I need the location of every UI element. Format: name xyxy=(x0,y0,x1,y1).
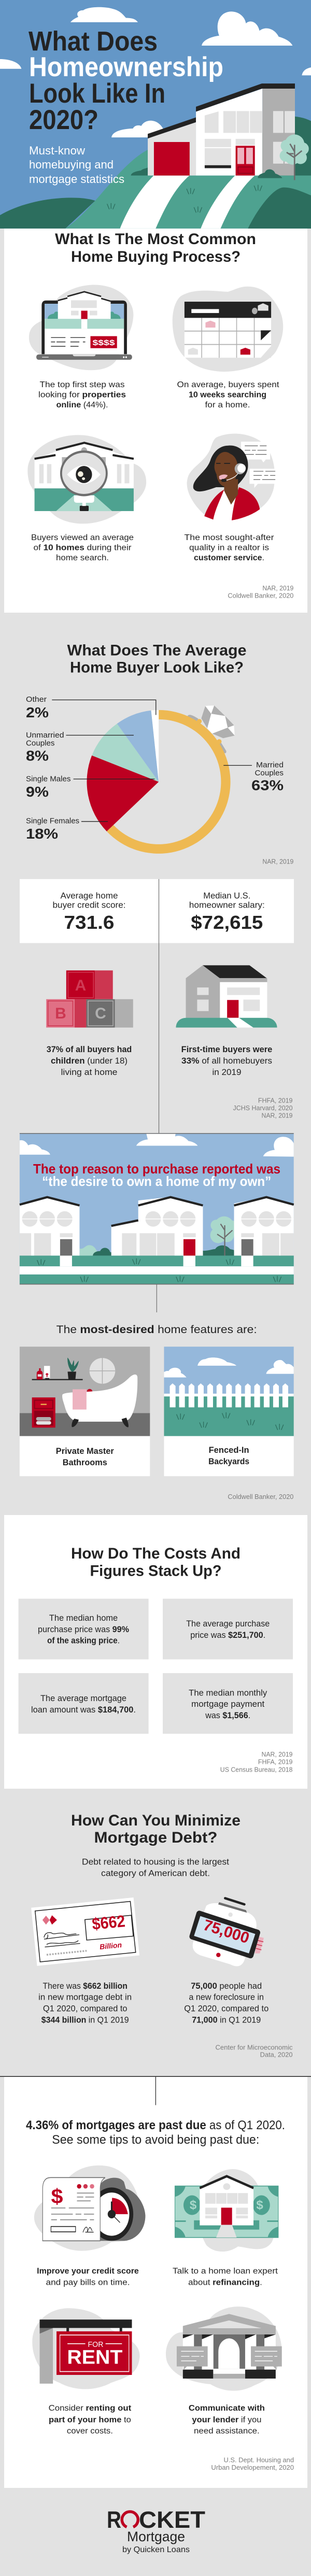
stat box: loan amount: The average mortgage xyxy=(40,1694,126,1703)
card: fenced-in backyards: Fenced-In xyxy=(209,1446,249,1455)
caption: foreclosures: Q1 2020, compared to xyxy=(184,2004,268,2013)
icon: magnifier over house xyxy=(27,435,146,523)
caption: customer service: The most sought-after xyxy=(185,533,274,542)
bill dollar sign: $ xyxy=(51,2185,63,2208)
stat box: asking price: of the asking price. xyxy=(47,1636,120,1646)
backyard illustration xyxy=(164,1347,294,1476)
laptop price label: $$$$ xyxy=(92,338,115,347)
caption: credit score: Improve your credit score xyxy=(37,2267,139,2276)
caption: customer service: customer service . xyxy=(194,554,264,562)
chart labels: 8% xyxy=(26,747,49,764)
heading: Home Buying Process? xyxy=(71,248,241,265)
caption: renting: Consider renting out xyxy=(49,2404,131,2413)
caption: customer service xyxy=(185,533,274,562)
hero title: Look Like In xyxy=(29,78,165,109)
chart labels: 9% xyxy=(26,784,49,800)
caption: search weeks: 10 weeks searching xyxy=(189,390,266,399)
hero subtitle: Must-know xyxy=(29,144,85,157)
caption: search weeks: On average, buyers spent xyxy=(177,380,279,389)
icon: house on money: $ xyxy=(256,2198,263,2212)
caption: homes viewed: home search. xyxy=(56,554,109,562)
hero subtitle xyxy=(29,144,124,186)
intro: 4.36% of mortgages are past due as of Q1 2020. xyxy=(26,2118,285,2132)
caption: new mortgage debt xyxy=(38,1981,132,2025)
source: NAR, 2019 xyxy=(262,858,293,866)
caption: refinancing xyxy=(173,2267,278,2287)
sources: U.S. Dept. Housing and xyxy=(224,2456,294,2464)
sources: FHFA, 2019 xyxy=(258,1758,293,1765)
caption: lender xyxy=(189,2404,265,2436)
caption: refinancing: about refinancing . xyxy=(188,2278,262,2287)
caption: foreclosures xyxy=(184,1981,268,2025)
block letters xyxy=(55,977,106,1022)
sources xyxy=(233,1097,293,1120)
icon: for rent sign: FOR xyxy=(88,2340,104,2349)
caption: credit score xyxy=(37,2267,139,2287)
chart labels: Married xyxy=(256,761,284,769)
stat box: average price xyxy=(163,1598,293,1660)
bathroom illustration xyxy=(20,1347,150,1476)
heading: How Can You Minimize xyxy=(71,1812,241,1829)
sources: NAR, 2019 xyxy=(262,585,293,592)
panel: home buying process xyxy=(4,229,307,613)
stat card: salary xyxy=(159,879,294,943)
subheading: desired features: The most-desired home features are: xyxy=(56,1324,257,1336)
caption: renting xyxy=(49,2404,131,2436)
card: private master bathrooms: Private Master xyxy=(56,1447,114,1456)
icon: for rent sign: RENT xyxy=(67,2347,122,2369)
stat card: salary: homeowner salary: xyxy=(189,900,265,910)
icon: bill and clock xyxy=(34,2165,145,2251)
intro text: Debt related to housing is the largest xyxy=(82,1858,229,1867)
sources: Data, 2020 xyxy=(260,2051,293,2059)
sources: JCHS Harvard, 2020 xyxy=(233,1105,293,1112)
chart labels: Couples xyxy=(26,739,55,747)
caption: search weeks xyxy=(177,380,279,409)
stat box: asking price: The median home xyxy=(49,1613,118,1623)
caption: children: living at home xyxy=(61,1068,117,1077)
sources xyxy=(211,2456,294,2471)
caption: children xyxy=(47,1045,132,1077)
stat box: monthly payment: was $1,566. xyxy=(205,1711,250,1720)
intro: See some tips to avoid being past due: xyxy=(52,2133,259,2147)
caption: foreclosures: 75,000 people had xyxy=(191,1981,262,1991)
stat card: salary: Median U.S. xyxy=(203,891,250,900)
intro text xyxy=(82,1858,229,1878)
stat box: average price: The average purchase xyxy=(186,1619,270,1629)
caption: new mortgage debt: $344 billion in Q1 2019 xyxy=(41,2015,129,2025)
intro text: category of American debt. xyxy=(101,1869,210,1878)
icon: bank with speech bubbles xyxy=(166,2306,282,2391)
sources: Center for Microeconomic xyxy=(216,2044,292,2051)
card: fenced-in backyards: Backyards xyxy=(208,1457,249,1466)
caption: foreclosures: 71,000 in Q1 2019 xyxy=(192,2015,261,2025)
card: fenced-in backyards xyxy=(164,1347,294,1476)
footer logo xyxy=(0,2488,311,2576)
chart labels: 18% xyxy=(26,826,58,842)
banner text: The top reason to purchase reported was xyxy=(33,1161,280,1177)
block letters: A xyxy=(75,977,86,994)
icon: house on money xyxy=(175,2169,278,2252)
panel: past due tips xyxy=(0,2076,311,2488)
banner text: “the desire to own a home of my own” xyxy=(42,1173,271,1189)
stat box: monthly payment xyxy=(163,1673,293,1734)
banner text xyxy=(33,1161,280,1189)
icon: counter: 75,000 xyxy=(201,1917,251,1947)
icon: check: $662 xyxy=(91,1912,126,1933)
source: Coldwell Banker, 2020 xyxy=(228,1493,293,1501)
heading xyxy=(71,1545,241,1580)
caption: online: looking for properties xyxy=(38,390,126,399)
hero illustration xyxy=(0,0,311,229)
chart labels: Single Males xyxy=(26,774,70,783)
icon: realtor with headset xyxy=(187,434,275,521)
chart labels xyxy=(26,695,284,842)
icon: for rent sign xyxy=(32,2308,140,2389)
sources xyxy=(228,585,293,600)
stat card: credit score: Average home xyxy=(60,891,118,900)
caption: refinancing: Talk to a home loan expert xyxy=(173,2267,278,2276)
caption: credit score: and pay bills on time. xyxy=(46,2278,130,2287)
caption: new mortgage debt: There was $662 billion xyxy=(43,1981,128,1991)
icon: alphabet blocks xyxy=(46,970,133,1027)
icon: counter xyxy=(192,1898,264,1966)
caption: new mortgage debt: Q1 2020, compared to xyxy=(43,2004,128,2013)
block letters: B xyxy=(55,1005,66,1022)
sources xyxy=(220,1751,293,1773)
hero subtitle: mortgage statistics xyxy=(29,173,124,186)
hero title xyxy=(29,26,223,135)
banner: top reason xyxy=(20,1133,294,1284)
caption: homes viewed: of 10 homes during their xyxy=(33,543,132,553)
panel: hero xyxy=(0,0,311,229)
stat card: salary: $72,615 xyxy=(191,912,263,933)
caption: first-time buyers: 33% of all homebuyers xyxy=(181,1056,272,1066)
chart labels: Couples xyxy=(255,769,284,777)
panel: average home buyer xyxy=(0,613,311,1515)
caption: children: 37% of all buyers had xyxy=(47,1045,132,1054)
caption: new mortgage debt: in new mortgage debt in xyxy=(38,1993,132,2002)
block letters: C xyxy=(95,1005,106,1022)
caption: online: online (44%). xyxy=(56,401,108,409)
sources xyxy=(216,2044,293,2059)
chart labels: 2% xyxy=(26,704,49,720)
caption: homes viewed: Buyers viewed an average xyxy=(31,533,134,542)
caption: search weeks: for a home. xyxy=(205,401,250,409)
footer logo: by Quicken Loans xyxy=(122,2545,190,2554)
sources: US Census Bureau, 2018 xyxy=(220,1766,293,1773)
card: private master bathrooms xyxy=(20,1347,150,1476)
heading: What Does The Average xyxy=(67,642,247,659)
heading xyxy=(55,231,256,265)
caption: children: children (under 18) xyxy=(51,1056,128,1066)
stat card: credit score: 731.6 xyxy=(64,912,114,933)
caption: first-time buyers: First-time buyers were xyxy=(181,1045,272,1054)
hero title: What Does xyxy=(29,26,158,57)
stat box: loan amount: loan amount was $184,700. xyxy=(31,1705,136,1715)
neighborhood illustration xyxy=(20,1133,294,1284)
caption: first-time buyers: in 2019 xyxy=(213,1068,242,1077)
heading: How Do The Costs And xyxy=(71,1545,241,1562)
heading xyxy=(67,642,247,676)
hero title: 2020? xyxy=(29,105,98,135)
stat box: asking price: purchase price was 99% xyxy=(38,1625,129,1634)
stat box: average price: price was $251,700. xyxy=(190,1631,265,1640)
intro xyxy=(26,2118,285,2147)
caption: customer service: quality in a realtor is xyxy=(189,543,269,553)
footer logo: Mortgage xyxy=(127,2529,185,2544)
footer logo: R xyxy=(107,2507,121,2533)
caption: first-time buyers xyxy=(181,1045,272,1077)
caption: renting: cover costs. xyxy=(67,2427,113,2436)
hero title: Homeownership xyxy=(29,52,223,82)
stat box: monthly payment: mortgage payment xyxy=(191,1700,265,1709)
chart labels: 63% xyxy=(251,777,284,793)
stat box: asking price xyxy=(19,1598,149,1660)
card: private master bathrooms: Bathrooms xyxy=(63,1458,107,1467)
caption: lender: need assistance. xyxy=(194,2427,260,2436)
chart labels: Other xyxy=(26,695,47,704)
icon: check xyxy=(31,1898,139,1966)
caption: foreclosures: a new foreclosure in xyxy=(189,1993,264,2002)
heading: Mortgage Debt? xyxy=(94,1829,218,1846)
sources: NAR, 2019 xyxy=(261,1112,293,1120)
stat box: loan amount xyxy=(19,1673,149,1734)
panel: minimize mortgage debt xyxy=(0,1789,311,2076)
caption: lender: Communicate with xyxy=(189,2404,265,2413)
caption: homes viewed xyxy=(31,533,134,562)
caption: online: The top first step was xyxy=(39,380,125,389)
footer logo: CKET xyxy=(139,2507,205,2533)
heading: Figures Stack Up? xyxy=(90,1562,222,1580)
icon: laptop with house listing xyxy=(29,285,133,370)
sources: FHFA, 2019 xyxy=(258,1097,293,1105)
stat card: credit score xyxy=(20,879,159,943)
stat card: credit score: buyer credit score: xyxy=(53,900,125,910)
icon: calendar xyxy=(173,287,283,372)
sources: Urban Developement, 2020 xyxy=(211,2464,294,2471)
heading xyxy=(71,1812,241,1846)
caption: renting: part of your home to xyxy=(49,2415,131,2424)
chart labels: Single Females xyxy=(26,816,79,825)
icon: house on money: $ xyxy=(190,2198,197,2212)
hero subtitle: homebuying and xyxy=(29,158,114,171)
icon: check: Billion xyxy=(99,1941,122,1951)
caption: lender: your lender if you xyxy=(192,2415,261,2424)
sources: NAR, 2019 xyxy=(261,1751,293,1758)
chart labels: Unmarried xyxy=(26,731,64,740)
stat box: monthly payment: The median monthly xyxy=(189,1688,267,1697)
icon: starter house xyxy=(176,965,277,1027)
chart: ring pie xyxy=(52,700,252,854)
caption: online xyxy=(38,380,126,409)
sources: Coldwell Banker, 2020 xyxy=(228,592,293,600)
heading: What Is The Most Common xyxy=(55,231,256,248)
heading: Home Buyer Look Like? xyxy=(70,659,244,676)
panel: costs and figures xyxy=(4,1515,307,1789)
